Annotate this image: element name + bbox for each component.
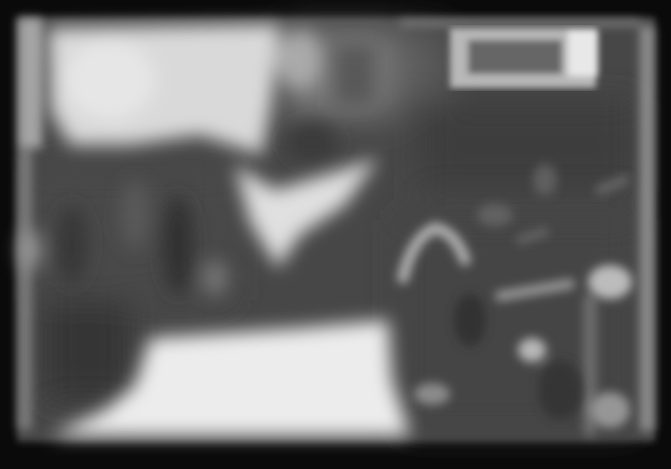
light triangle centre — [235, 158, 378, 268]
top right banner — [450, 28, 598, 88]
large light area top left — [48, 24, 322, 155]
left edge strip — [18, 18, 42, 430]
right side speckles — [403, 180, 625, 430]
dark blob — [286, 45, 375, 162]
left middle tones — [20, 180, 227, 296]
upper sky and shadow tones — [40, 28, 635, 430]
bottom white area — [50, 320, 410, 436]
right edge strip and top edge — [400, 20, 654, 431]
